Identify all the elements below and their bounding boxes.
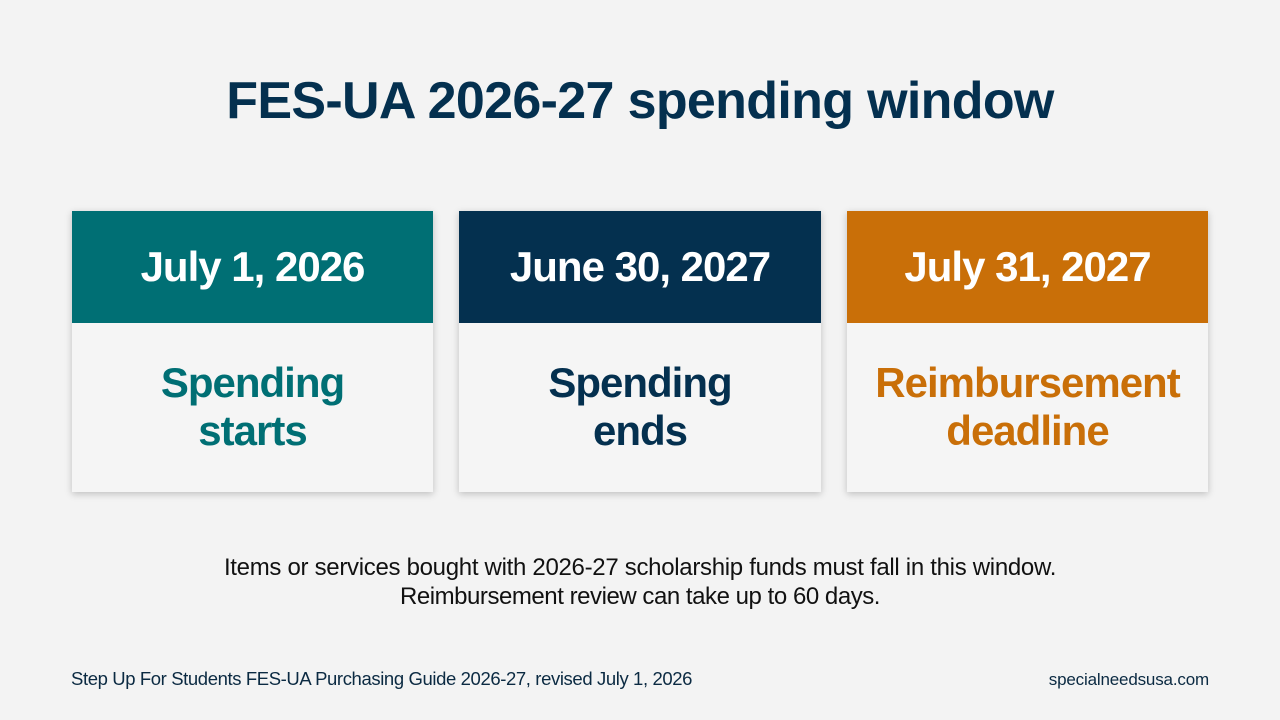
date: July 31, 2027: July 31, 2027: [904, 243, 1151, 290]
date: June 30, 2027: [459, 211, 821, 323]
explanatory note: [224, 554, 1056, 610]
label: reimbursement deadline: [875, 359, 1180, 454]
label: spending starts: Spending: [161, 359, 344, 406]
date: July 31, 2027: [847, 211, 1208, 323]
label: reimbursement deadline: Reimbursement: [875, 359, 1180, 406]
title: FES-UA 2026-27 spending window: [226, 72, 1054, 130]
date: July 1, 2026: [72, 211, 433, 323]
panel: spending starts: [72, 211, 433, 492]
label: spending ends: Spending: [548, 359, 732, 406]
source citation: Step Up For Students FES-UA Purchasing Guide 2026-27, revised July 1, 2026: [71, 668, 692, 689]
label: spending ends: [548, 359, 732, 454]
website credit: specialneedsusa.com: [1049, 670, 1209, 689]
explanatory note: Items or services bought with 2026-27 scholarship funds must fall in this window.: [224, 554, 1056, 581]
date: June 30, 2027: June 30, 2027: [510, 243, 770, 290]
date: July 1, 2026: July 1, 2026: [141, 243, 364, 290]
label: spending ends: ends: [593, 407, 687, 454]
panel: spending ends: [459, 211, 821, 492]
label: spending starts: starts: [198, 407, 307, 454]
explanatory note: Reimbursement review can take up to 60 days.: [400, 582, 880, 610]
label: reimbursement deadline: deadline: [946, 407, 1109, 454]
panel: reimbursement deadline: [847, 211, 1208, 492]
label: spending starts: [161, 359, 344, 454]
